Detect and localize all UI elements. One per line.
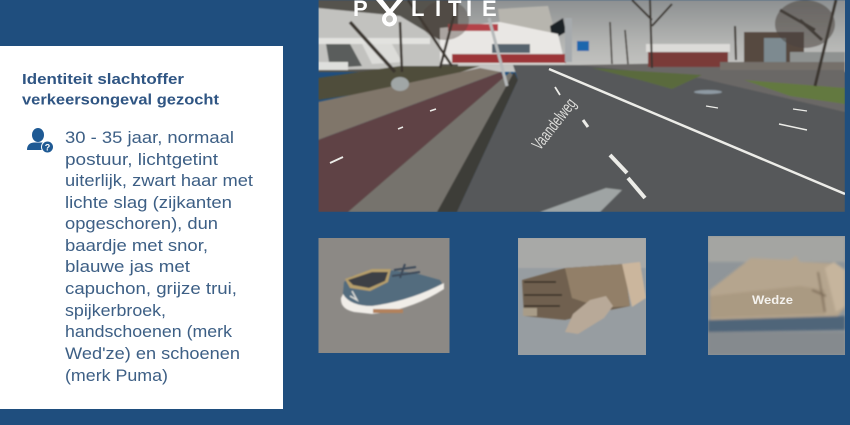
heading: Identiteit slachtoffer — [22, 72, 184, 88]
logo: POLITIE — [353, 0, 497, 24]
description text: capuchon, grijze trui, — [65, 279, 237, 298]
description text: handschoenen (merk — [65, 322, 233, 341]
photo: street view of accident location — [318, 0, 848, 212]
heading: verkeersongeval gezocht — [22, 92, 219, 108]
description text: spijkerbroek, — [65, 301, 166, 320]
description text: lichte slag (zijkanten — [65, 193, 232, 212]
road name label: Vaandelweg — [528, 94, 580, 153]
description text: blauwe jas met — [65, 257, 190, 276]
description text: uiterlijk, zwart haar met — [65, 171, 253, 190]
description text — [65, 128, 253, 385]
panel: description card — [0, 46, 283, 409]
description text: postuur, lichtgetint — [65, 150, 218, 169]
icon: person with question mark: ? — [45, 142, 50, 152]
description text: baardje met snor, — [65, 236, 208, 255]
icon: police shield — [376, 0, 403, 24]
description text: (merk Puma) — [65, 366, 168, 385]
road markings — [330, 69, 845, 198]
brand label: Wedze — [752, 293, 793, 307]
photo: glove palm side — [518, 238, 646, 355]
description text: Wed'ze) en schoenen — [65, 344, 240, 363]
photo: blue Puma shoe — [318, 238, 450, 353]
icon: person with question mark — [27, 128, 54, 153]
heading — [22, 72, 219, 108]
photo: glove with Wed'ze logo — [708, 236, 845, 355]
description text: 30 - 35 jaar, normaal — [65, 128, 234, 147]
description text: opgeschoren), dun — [65, 214, 218, 233]
